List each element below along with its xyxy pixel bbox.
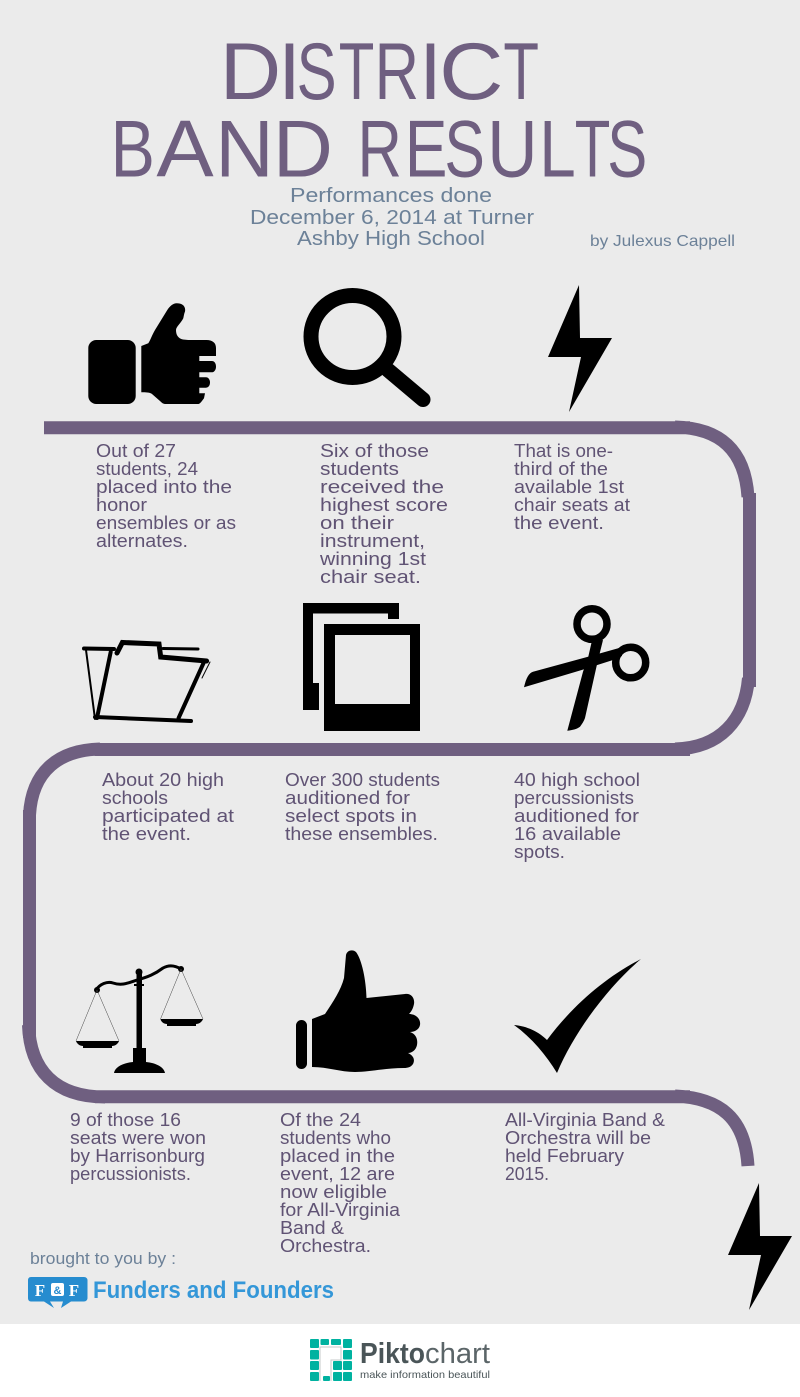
panel: 24 of 27 placed xyxy=(88,303,236,551)
text: auditions: auditioned for xyxy=(285,787,410,808)
title: R xyxy=(375,27,419,117)
text: schools: About 20 high xyxy=(102,769,224,790)
author byline: by Julexus Cappell xyxy=(590,233,735,250)
text: February 2015: Orchestra will be xyxy=(505,1127,651,1148)
subtitle: December 6, 2014 at Turner xyxy=(250,206,534,229)
text: percussion: 40 high school xyxy=(514,769,640,790)
title: E xyxy=(405,104,448,194)
text: one-third: available 1st xyxy=(514,476,624,497)
title: T xyxy=(503,27,539,117)
title: L xyxy=(539,104,576,194)
title: I xyxy=(278,27,301,117)
text: highest score: Six of those xyxy=(320,440,429,461)
logo: Funders and Founders: Funders and Founders xyxy=(93,1277,334,1304)
panel: 9 of 16 seats xyxy=(70,966,206,1184)
text: placement xyxy=(96,440,236,551)
title: R xyxy=(358,104,402,194)
text: Harrisonburg: seats were won xyxy=(70,1127,206,1148)
text: one-third: That is one- xyxy=(514,440,613,461)
logo: Piktochart: Pikto xyxy=(360,1338,425,1370)
logo: Funders and Founders: & xyxy=(54,1285,62,1297)
text: February 2015: All-Virginia Band & xyxy=(505,1109,666,1130)
text: auditions: Over 300 students xyxy=(285,769,440,790)
subtitle xyxy=(250,184,534,250)
text: one-third xyxy=(514,440,630,533)
text: placement: alternates. xyxy=(96,530,188,551)
text: one-third: chair seats at xyxy=(514,494,630,515)
text: percussion: auditioned for xyxy=(514,805,639,826)
text: one-third: the event. xyxy=(514,512,604,533)
title: D xyxy=(273,104,333,194)
text: February 2015: 2015. xyxy=(505,1163,549,1184)
panel: six 1st chairs xyxy=(311,296,448,587)
text: percussion: spots. xyxy=(514,841,565,862)
panel: All-Virginia date xyxy=(505,959,666,1184)
title xyxy=(111,27,647,194)
text: All-Virginia eligibility: Of the 24 xyxy=(280,1109,361,1130)
footer band xyxy=(0,1324,800,1397)
title: T xyxy=(575,104,610,194)
text: percussion xyxy=(514,769,640,862)
text: auditions: these ensembles. xyxy=(285,823,438,844)
text: schools: the event. xyxy=(102,823,191,844)
text: schools: schools xyxy=(102,787,168,808)
text: February 2015: held February xyxy=(505,1145,625,1166)
text: All-Virginia eligibility: placed in the xyxy=(280,1145,395,1166)
text: All-Virginia eligibility: now eligible xyxy=(280,1181,387,1202)
panel: one-third of seats xyxy=(514,285,630,533)
text: All-Virginia eligibility: for All-Virginia xyxy=(280,1199,401,1220)
text: placement: students, 24 xyxy=(96,458,198,479)
title: S xyxy=(444,104,485,194)
title: T xyxy=(339,27,374,117)
text: highest score: chair seat. xyxy=(320,566,421,587)
panel: 20 high schools xyxy=(84,642,234,844)
icon: check mark xyxy=(514,959,641,1073)
text: February 2015 xyxy=(505,1109,666,1184)
text: auditions xyxy=(285,769,440,844)
text: highest score: students xyxy=(320,458,399,479)
text: placement: honor xyxy=(96,494,147,515)
winding timeline path xyxy=(28,427,750,1166)
icon: sketched folder xyxy=(84,642,210,721)
logo: Funders and Founders: F xyxy=(69,1281,79,1300)
text: percussion: 16 available xyxy=(514,823,621,844)
icon: stacked photos xyxy=(303,603,420,731)
panel: 40 percussionists xyxy=(514,609,646,862)
text: Harrisonburg: 9 of those 16 xyxy=(70,1109,181,1130)
icon: scissors xyxy=(524,609,646,731)
icon: lightning bolt xyxy=(548,285,612,412)
text: highest score: on their xyxy=(320,512,394,533)
text: highest score: highest score xyxy=(320,494,448,515)
text: auditions: select spots in xyxy=(285,805,417,826)
text: Harrisonburg: percussionists. xyxy=(70,1163,191,1184)
icon: balance scales xyxy=(76,966,203,1073)
subtitle: Ashby High School xyxy=(297,227,485,250)
title: D xyxy=(220,27,281,117)
text: All-Virginia eligibility: event, 12 are xyxy=(280,1163,395,1184)
text: All-Virginia eligibility: Orchestra. xyxy=(280,1235,371,1256)
icon: thumbs up xyxy=(88,303,216,404)
text: highest score xyxy=(319,440,448,587)
logo: Piktochart xyxy=(310,1338,490,1381)
text: placement: Out of 27 xyxy=(96,440,176,461)
text: highest score: instrument, xyxy=(320,530,425,551)
subtitle: Performances done xyxy=(290,184,492,207)
title: I xyxy=(419,27,442,117)
panel: 300 students xyxy=(285,603,440,844)
title: C xyxy=(439,27,503,117)
icon: end lightning bolt xyxy=(728,1183,792,1310)
logo: Funders and Founders: F xyxy=(35,1281,45,1300)
text: Harrisonburg: by Harrisonburg xyxy=(70,1145,205,1166)
text: All-Virginia eligibility xyxy=(280,1109,401,1256)
title: A xyxy=(156,104,214,194)
text: one-third: third of the xyxy=(514,458,608,479)
text: schools xyxy=(102,769,234,844)
title: B xyxy=(111,104,155,194)
text: placement: placed into the xyxy=(96,476,232,497)
logo: Funders and Founders xyxy=(28,1277,334,1308)
text: All-Virginia eligibility: students who xyxy=(280,1127,391,1148)
text: placement: ensembles or as xyxy=(96,512,236,533)
text: schools: participated at xyxy=(102,805,234,826)
text: percussion: percussionists xyxy=(514,787,634,808)
title: S xyxy=(297,27,337,117)
text: highest score: received the xyxy=(320,476,444,497)
title: N xyxy=(215,104,274,194)
panel: 12 eligible xyxy=(280,950,420,1256)
logo: Piktochart: chart xyxy=(425,1338,490,1370)
icon: Piktochart mosaic xyxy=(310,1339,352,1381)
logo: Piktochart: make information beautiful xyxy=(360,1369,490,1381)
text: Harrisonburg xyxy=(70,1109,206,1184)
text: highest score: winning 1st xyxy=(319,548,426,569)
title: S xyxy=(607,104,647,194)
text: All-Virginia eligibility: Band & xyxy=(280,1217,345,1238)
icon: magnifying glass xyxy=(311,296,423,400)
title: U xyxy=(487,104,538,194)
icon: large thumbs up xyxy=(296,950,420,1072)
credit: brought to you by: brought to you by : xyxy=(30,1250,176,1268)
